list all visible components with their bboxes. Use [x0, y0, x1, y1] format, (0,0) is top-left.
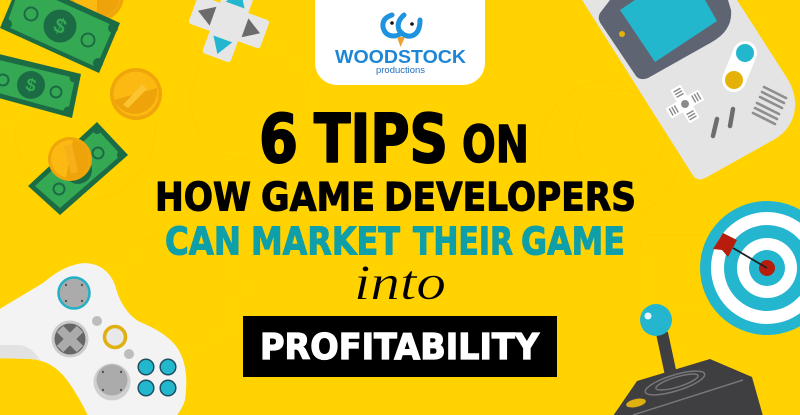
script word: into: into [354, 254, 446, 310]
coin: lower [48, 137, 92, 181]
console screen [620, 0, 717, 62]
logo: wordmark: WOODSTOCK [335, 47, 466, 67]
title: 6 tips on: ON [462, 116, 529, 175]
controller face buttons [138, 359, 176, 396]
heading: how game developers [155, 176, 636, 220]
heading: can market their game: GAME [521, 220, 625, 264]
icon: game controller [0, 263, 186, 415]
heading: can market their game: CAN [165, 220, 241, 264]
console speaker [753, 87, 786, 124]
banner: profitability [243, 316, 557, 377]
controller d-pad [52, 320, 88, 358]
console buttons [725, 44, 754, 89]
console power light [619, 31, 625, 37]
title: 6 tips on: TIPS [314, 100, 448, 178]
banner: profitability: PROFITABILITY [260, 327, 540, 368]
title: 6 tips on: 6 [259, 100, 298, 178]
coin: middle [110, 68, 162, 120]
heading: how game developers: HOW [155, 176, 251, 220]
controller left stick [58, 278, 90, 308]
controller small buttons [92, 316, 134, 359]
heading: how game developers: DEVELOPERS [384, 176, 636, 220]
heading: can market their game: THEIR [413, 220, 513, 264]
console mini d-pad [659, 78, 711, 130]
heading: can market their game [165, 220, 625, 264]
icon: logo panel [315, 0, 485, 85]
bill: middle [0, 53, 81, 118]
icon: d-pad [180, 0, 278, 71]
controller centre ring [104, 326, 126, 348]
bill: lower [28, 122, 128, 215]
bill: top [0, 0, 120, 73]
icon: arcade joystick [613, 304, 763, 415]
console screen bezel [599, 0, 731, 79]
logo: owl mark [383, 15, 420, 47]
title: 6 tips on [259, 100, 529, 178]
bill: top: $ [50, 14, 70, 39]
heading: how game developers: GAME [261, 176, 375, 220]
controller right stick [94, 364, 130, 400]
icon: target with dart [700, 201, 800, 335]
icon: handheld game console [582, 0, 795, 179]
coin: top [70, 0, 124, 22]
console slits [713, 109, 733, 136]
bill: middle: $ [24, 74, 38, 96]
logo: tagline: productions [376, 65, 425, 76]
heading: can market their game: MARKET [251, 220, 400, 264]
